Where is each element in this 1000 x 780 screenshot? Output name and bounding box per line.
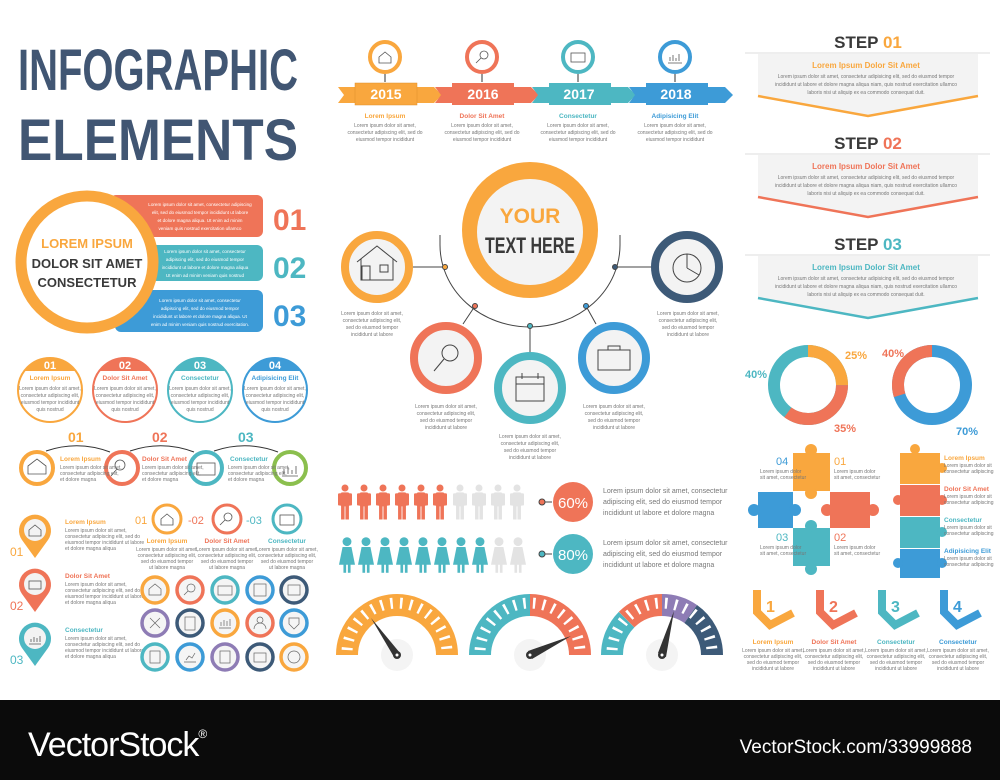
step banners: STEP 02 — [834, 134, 902, 153]
check steps 1-4: Lorem Ipsum — [753, 639, 794, 646]
panel: numbered icon process: Consectetur — [268, 538, 306, 545]
panel: numbered icon process: sed do eiusmod tempor — [201, 559, 253, 565]
panel: map pins: Lorem ipsum dolor sit amet, — [65, 582, 127, 588]
people chart: Lorem ipsum dolor sit amet, consectetur — [603, 540, 728, 547]
central hub diagram: incididunt ut labore — [351, 332, 393, 338]
puzzle: four pieces: 02 — [834, 532, 846, 544]
puzzle: vertical stack: consectetur adipiscing — [944, 500, 994, 506]
puzzle: vertical stack: consectetur adipiscing — [944, 562, 994, 568]
panel: arrow process 01-03: 01 — [68, 429, 84, 445]
panel: four circle steps: 01 — [44, 360, 56, 372]
panel: four circle steps — [18, 358, 307, 422]
timeline 2015-2018: Lorem ipsum dolor sit amet, — [354, 123, 416, 129]
panel: four circle steps: eiusmod tempor incididunt — [21, 400, 80, 406]
central hub diagram: Lorem ipsum dolor sit amet, — [657, 311, 719, 317]
panel: four circle steps: quis nostrud — [261, 407, 289, 413]
panel: arrow process 01-03: consectetur adipiscing elit, — [60, 471, 119, 477]
panel: circle with three bars: incididunt ut labore et dolore magna aliqua. Ut — [153, 314, 248, 319]
panel: four circle steps: Lorem Ipsum — [30, 375, 71, 382]
timeline 2015-2018: eiusmod tempor incididunt — [453, 137, 512, 143]
panel: map pins: Lorem Ipsum — [65, 519, 106, 526]
panel: map pins: eiusmod tempor incididunt ut labore — [65, 594, 144, 600]
puzzle: four pieces: sit amet, consectetur — [834, 551, 880, 557]
timeline 2015-2018: consectetur adipiscing elit, sed do — [444, 130, 520, 136]
gauges — [347, 603, 712, 671]
panel: circle with three bars: Lorem ipsum dolor sit amet, consectetur — [159, 298, 241, 303]
timeline 2015-2018: 2018 — [660, 86, 692, 102]
check steps 1-4: Consectetur — [939, 639, 977, 646]
check steps 1-4: consectetur adipiscing elit, — [744, 654, 802, 660]
timeline 2015-2018: consectetur adipiscing elit, sed do — [540, 130, 616, 136]
panel: numbered icon process: -02 — [188, 515, 204, 527]
check steps 1-4: incididunt ut labore — [813, 666, 855, 672]
puzzle: vertical stack: consectetur adipiscing — [944, 469, 994, 475]
puzzle: four pieces: Lorem ipsum dolor — [760, 545, 802, 551]
panel: numbered icon process: ut labore magna — [149, 565, 185, 571]
panel: map pins: Dolor Sit Amet — [65, 573, 111, 580]
panel: numbered icon process: Lorem ipsum dolor sit amet, — [256, 547, 318, 553]
panel: circle with three bars: 02 — [273, 252, 306, 285]
check steps 1-4: sed do eiusmod tempor — [808, 660, 860, 666]
check steps 1-4: consectetur adipiscing elit, — [867, 654, 925, 660]
panel: circle with three bars: veniam quis nostrud exercitation ullamco — [159, 226, 242, 231]
check steps 1-4: Lorem ipsum dolor sit amet, — [927, 648, 989, 654]
panel: numbered icon process: sed do eiusmod tempor — [141, 559, 193, 565]
check steps 1-4: incididunt ut labore — [937, 666, 979, 672]
timeline 2015-2018: Consectetur — [559, 113, 597, 120]
puzzle: vertical stack: Consectetur — [944, 517, 982, 524]
panel: circle with three bars: Lorem ipsum dolor sit amet, consectetur — [164, 249, 246, 254]
panel: numbered icon process — [135, 505, 318, 571]
step banners — [745, 33, 990, 318]
panel: arrow process 01-03: consectetur adipiscing elit, — [142, 471, 201, 477]
panel: map pins: Consectetur — [65, 627, 103, 634]
puzzle: four pieces: 04 — [776, 456, 788, 468]
panel: four circle steps: Lorem ipsum dolor sit amet, — [244, 386, 306, 392]
timeline 2015-2018 — [338, 42, 733, 143]
check steps 1-4: sed do eiusmod tempor — [932, 660, 984, 666]
central hub diagram: consectetur adipiscing elit, — [585, 411, 643, 417]
check steps 1-4: Consectetur — [877, 639, 915, 646]
step banners: Lorem Ipsum Dolor Sit Amet — [812, 61, 920, 70]
panel: map pins — [10, 515, 144, 667]
check steps 1-4: Lorem ipsum dolor sit amet, — [865, 648, 927, 654]
timeline 2015-2018: Adipisicing Elit — [652, 113, 699, 120]
footer bar — [0, 700, 1000, 780]
panel: four circle steps: quis nostrud — [111, 407, 139, 413]
puzzle: four pieces: sit amet, consectetur — [760, 475, 806, 481]
panel: four circle steps: eiusmod tempor incididunt — [246, 400, 305, 406]
panel: map pins: eiusmod tempor incididunt ut labore — [65, 648, 144, 654]
panel: map pins: eiusmod tempor incididunt ut labore — [65, 540, 144, 546]
panel: circle with three bars: Ut enim ad minim veniam quis nostrud — [166, 273, 245, 278]
puzzle: four pieces — [748, 444, 880, 575]
panel: map pins: 02 — [10, 599, 24, 613]
panel: numbered icon process: consectetur adipiscing elit, — [138, 553, 196, 559]
puzzle: vertical stack: Dolor Sit Amet — [944, 486, 990, 493]
people chart: adipiscing elit, sed do eiusmod tempor — [603, 499, 723, 506]
people chart — [338, 482, 728, 574]
people chart: adipiscing elit, sed do eiusmod tempor — [603, 551, 723, 558]
panel: arrow process 01-03: consectetur adipiscing elit, — [228, 471, 287, 477]
panel: numbered icon process: Dolor Sit Amet — [205, 538, 250, 545]
panel: four circle steps: Lorem ipsum dolor sit amet, — [19, 386, 81, 392]
people chart: incididunt ut labore et dolore magna — [603, 510, 714, 517]
step banners: incididunt ut labore et dolore magna aliqua niam, quis nostrud exercitation ullamco — [775, 284, 957, 290]
puzzle: four pieces: sit amet, consectetur — [760, 551, 806, 557]
donut charts: 40% — [745, 369, 767, 381]
panel: numbered icon process: Lorem ipsum dolor sit amet, — [136, 547, 198, 553]
step banners: STEP 01 — [834, 33, 902, 52]
people chart: Lorem ipsum dolor sit amet, consectetur — [603, 488, 728, 495]
central hub diagram: Lorem ipsum dolor sit amet, — [341, 311, 403, 317]
puzzle: vertical stack: Lorem ipsum dolor sit — [944, 463, 992, 469]
puzzle: vertical stack: consectetur adipiscing — [944, 531, 994, 537]
puzzle: vertical stack — [893, 444, 994, 578]
panel: numbered icon process: consectetur adipiscing elit, — [258, 553, 316, 559]
panel: arrow process 01-03 — [21, 429, 306, 484]
central hub diagram: sed do eiusmod tempor — [504, 448, 556, 454]
central hub diagram: consectetur adipiscing elit, — [417, 411, 475, 417]
panel: circle with three bars: adipiscing elit, sed do eiusmod tempor — [161, 306, 240, 311]
panel: circle with three bars: 03 — [273, 300, 306, 333]
check steps 1-4 — [742, 590, 989, 672]
step banners: Lorem Ipsum Dolor Sit Amet — [812, 263, 920, 272]
step banners: Lorem ipsum dolor sit amet, consectetur adipisicing elit, sed do eiusmod tempor — [778, 276, 955, 282]
panel: map pins: et dolore magna aliqua — [65, 600, 116, 606]
check steps 1-4: sed do eiusmod tempor — [747, 660, 799, 666]
central hub diagram: incididunt ut labore — [509, 455, 551, 461]
panel: numbered icon process: -03 — [246, 515, 262, 527]
step banners: Lorem Ipsum Dolor Sit Amet — [812, 162, 920, 171]
panel: map pins: 01 — [10, 545, 24, 559]
check steps 1-4: consectetur adipiscing elit, — [929, 654, 987, 660]
panel: circle with three bars: enim ad minim veniam quis nostrud exercitation. — [151, 322, 249, 327]
title: ELEMENTS — [18, 108, 298, 173]
panel: four circle steps: Dolor Sit Amet — [103, 375, 148, 382]
central hub diagram: consectetur adipiscing elit, — [659, 318, 717, 324]
central hub diagram: TEXT HERE — [485, 233, 575, 258]
panel: map pins: Lorem ipsum dolor sit amet, — [65, 528, 127, 534]
timeline 2015-2018: Lorem ipsum dolor sit amet, — [547, 123, 609, 129]
puzzle: four pieces: Lorem ipsum dolor — [834, 469, 876, 475]
step banners: laboris nisi ut aliquip ex ea commodo consequat duit. — [807, 90, 925, 96]
puzzle: four pieces: Lorem ipsum dolor — [760, 469, 802, 475]
panel: four circle steps: Lorem ipsum dolor sit amet, — [169, 386, 231, 392]
central hub diagram: incididunt ut labore — [667, 332, 709, 338]
panel: map pins: consectetur adipiscing elit, sed do — [65, 534, 140, 540]
step banners: incididunt ut labore et dolore magna aliqua niam, quis nostrud exercitation ullamco — [775, 183, 957, 189]
panel: four circle steps: eiusmod tempor incididunt — [171, 400, 230, 406]
central hub diagram: sed do eiusmod tempor — [588, 418, 640, 424]
panel: circle with three bars — [21, 195, 306, 333]
panel: arrow process 01-03: Dolor Sit Amet — [142, 456, 188, 463]
panel: arrow process 01-03: et dolore magna — [60, 477, 96, 483]
step banners: STEP 03 — [834, 235, 902, 254]
panel: four circle steps: 02 — [119, 360, 131, 372]
step banners: incididunt ut labore et dolore magna aliqua niam, quis nostrud exercitation ullamco — [775, 82, 957, 88]
panel: circle with three bars: incididunt ut labore et dolore magna aliqua — [162, 265, 249, 270]
panel: circle with three bars: CONSECTETUR — [38, 275, 137, 290]
timeline 2015-2018: eiusmod tempor incididunt — [356, 137, 415, 143]
panel: four circle steps: 04 — [269, 360, 282, 372]
panel: four circle steps: consectetur adipiscing elit, — [246, 393, 304, 399]
check steps 1-4: incididunt ut labore — [752, 666, 794, 672]
panel: arrow process 01-03: Lorem ipsum dolor sit amet, — [142, 465, 204, 471]
central hub diagram: YOUR — [500, 205, 560, 228]
panel: map pins: consectetur adipiscing elit, sed do — [65, 588, 140, 594]
timeline 2015-2018: consectetur adipiscing elit, sed do — [637, 130, 713, 136]
panel: map pins: et dolore magna aliqua — [65, 654, 116, 660]
check steps 1-4: sed do eiusmod tempor — [870, 660, 922, 666]
footer bar: VectorStock.com/33999888 — [740, 737, 972, 758]
check steps 1-4: consectetur adipiscing elit, — [805, 654, 863, 660]
check steps 1-4: Lorem ipsum dolor sit amet, — [803, 648, 865, 654]
panel: arrow process 01-03: et dolore magna — [142, 477, 178, 483]
central hub diagram: Lorem ipsum dolor sit amet, — [415, 404, 477, 410]
panel: circle with three bars: adipiscing elit, sed do eiusmod tempor — [166, 257, 245, 262]
panel: circle with three bars: DOLOR SIT AMET — [32, 256, 142, 271]
timeline 2015-2018: 2017 — [563, 86, 595, 102]
timeline 2015-2018: eiusmod tempor incididunt — [646, 137, 705, 143]
panel: map pins: Lorem ipsum dolor sit amet, — [65, 636, 127, 642]
panel: numbered icon process: ut labore magna — [269, 565, 305, 571]
panel: arrow process 01-03: Consectetur — [230, 456, 268, 463]
central hub diagram: sed do eiusmod tempor — [420, 418, 472, 424]
check steps 1-4: 1 — [766, 599, 775, 616]
people chart: 60% — [558, 495, 588, 512]
people chart: incididunt ut labore et dolore magna — [603, 562, 714, 569]
panel: circle with three bars: 01 — [273, 204, 306, 237]
donut charts: 25% — [845, 350, 867, 362]
panel: map pins: et dolore magna aliqua — [65, 546, 116, 552]
puzzle: vertical stack: Lorem ipsum dolor sit — [944, 556, 992, 562]
check steps 1-4: 2 — [829, 599, 838, 616]
panel: arrow process 01-03: 03 — [238, 429, 254, 445]
panel: four circle steps: eiusmod tempor incididunt — [96, 400, 155, 406]
people chart: 80% — [558, 547, 588, 564]
panel: four circle steps: Consectetur — [181, 375, 219, 382]
puzzle: vertical stack: Adipisicing Elit — [944, 548, 992, 555]
panel: arrow process 01-03: Lorem ipsum dolor sit amet, — [228, 465, 290, 471]
step banners: Lorem ipsum dolor sit amet, consectetur adipisicing elit, sed do eiusmod tempor — [778, 74, 955, 80]
puzzle: four pieces: Lorem ipsum dolor — [834, 545, 876, 551]
check steps 1-4: incididunt ut labore — [875, 666, 917, 672]
panel: numbered icon process: 01 — [135, 515, 147, 527]
panel: four circle steps: consectetur adipiscing elit, — [96, 393, 154, 399]
timeline 2015-2018: Lorem ipsum dolor sit amet, — [644, 123, 706, 129]
timeline 2015-2018: consectetur adipiscing elit, sed do — [347, 130, 423, 136]
panel: numbered icon process: ut labore magna — [209, 565, 245, 571]
panel: four circle steps: 03 — [194, 360, 206, 372]
check steps 1-4: Lorem ipsum dolor sit amet, — [742, 648, 804, 654]
step banners: laboris nisi ut aliquip ex ea commodo consequat duit. — [807, 191, 925, 197]
central hub diagram: Lorem ipsum dolor sit amet, — [583, 404, 645, 410]
puzzle: vertical stack: Lorem ipsum dolor sit — [944, 494, 992, 500]
timeline 2015-2018: eiusmod tempor incididunt — [549, 137, 608, 143]
title: INFOGRAPHIC — [18, 38, 298, 103]
panel: numbered icon process: Lorem ipsum dolor sit amet, — [196, 547, 258, 553]
panel: four circle steps: Adipisicing Elit — [252, 375, 299, 382]
puzzle: four pieces: 01 — [834, 456, 846, 468]
icon grid — [142, 577, 307, 670]
central hub diagram: consectetur adipiscing elit, — [343, 318, 401, 324]
puzzle: vertical stack: Lorem ipsum dolor sit — [944, 525, 992, 531]
donut charts: 35% — [834, 423, 856, 435]
panel: numbered icon process: sed do eiusmod tempor — [261, 559, 313, 565]
check steps 1-4: 4 — [953, 599, 962, 616]
donut charts: 40% — [882, 348, 904, 360]
central hub diagram: incididunt ut labore — [593, 425, 635, 431]
panel: circle with three bars: Lorem ipsum dolor sit amet, consectetur adipiscing — [148, 202, 252, 207]
timeline 2015-2018: 2016 — [467, 86, 499, 102]
central hub diagram: sed do eiusmod tempor — [346, 325, 398, 331]
panel: four circle steps: consectetur adipiscing elit, — [21, 393, 79, 399]
panel: circle with three bars: LOREM IPSUM — [41, 236, 133, 251]
title — [18, 38, 298, 173]
puzzle: four pieces: 03 — [776, 532, 788, 544]
timeline 2015-2018: 2015 — [370, 86, 402, 102]
panel: four circle steps: Lorem ipsum dolor sit amet, — [94, 386, 156, 392]
panel: numbered icon process: Lorem Ipsum — [147, 538, 188, 545]
panel: four circle steps: quis nostrud — [36, 407, 64, 413]
footer bar: VectorStock — [28, 726, 198, 764]
panel: arrow process 01-03: Lorem Ipsum — [60, 456, 101, 463]
panel: four circle steps: consectetur adipiscing elit, — [171, 393, 229, 399]
donut charts: 70% — [956, 426, 978, 438]
puzzle: vertical stack: Lorem Ipsum — [944, 455, 985, 462]
central hub diagram: Lorem ipsum dolor sit amet, — [499, 434, 561, 440]
panel: numbered icon process: consectetur adipiscing elit, — [198, 553, 256, 559]
panel: circle with three bars: et dolore magna aliqua. Ut enim ad minim — [157, 218, 243, 223]
step banners: laboris nisi ut aliquip ex ea commodo consequat duit. — [807, 292, 925, 298]
central hub diagram — [341, 162, 719, 461]
panel: arrow process 01-03: 02 — [152, 429, 168, 445]
check steps 1-4: 3 — [891, 599, 900, 616]
step banners: Lorem ipsum dolor sit amet, consectetur adipisicing elit, sed do eiusmod tempor — [778, 175, 955, 181]
check steps 1-4: Dolor Sit Amet — [812, 639, 857, 646]
footer bar: ® — [198, 727, 207, 741]
panel: arrow process 01-03: et dolore magna — [228, 477, 264, 483]
timeline 2015-2018: Lorem ipsum dolor sit amet, — [451, 123, 513, 129]
panel: arrow process 01-03: Lorem ipsum dolor sit amet, — [60, 465, 122, 471]
central hub diagram: sed do eiusmod tempor — [662, 325, 714, 331]
donut charts — [745, 348, 978, 438]
central hub diagram: incididunt ut labore — [425, 425, 467, 431]
panel: map pins: consectetur adipiscing elit, sed do — [65, 642, 140, 648]
timeline 2015-2018: Lorem Ipsum — [365, 113, 406, 120]
puzzle: four pieces: sit amet, consectetur — [834, 475, 880, 481]
panel: map pins: 03 — [10, 653, 24, 667]
central hub diagram: consectetur adipiscing elit, — [501, 441, 559, 447]
timeline 2015-2018: Dolor Sit Amet — [460, 113, 505, 120]
panel: circle with three bars: elit, sed do eiusmod tempor incididunt ut labore — [152, 210, 249, 215]
panel: four circle steps: quis nostrud — [186, 407, 214, 413]
